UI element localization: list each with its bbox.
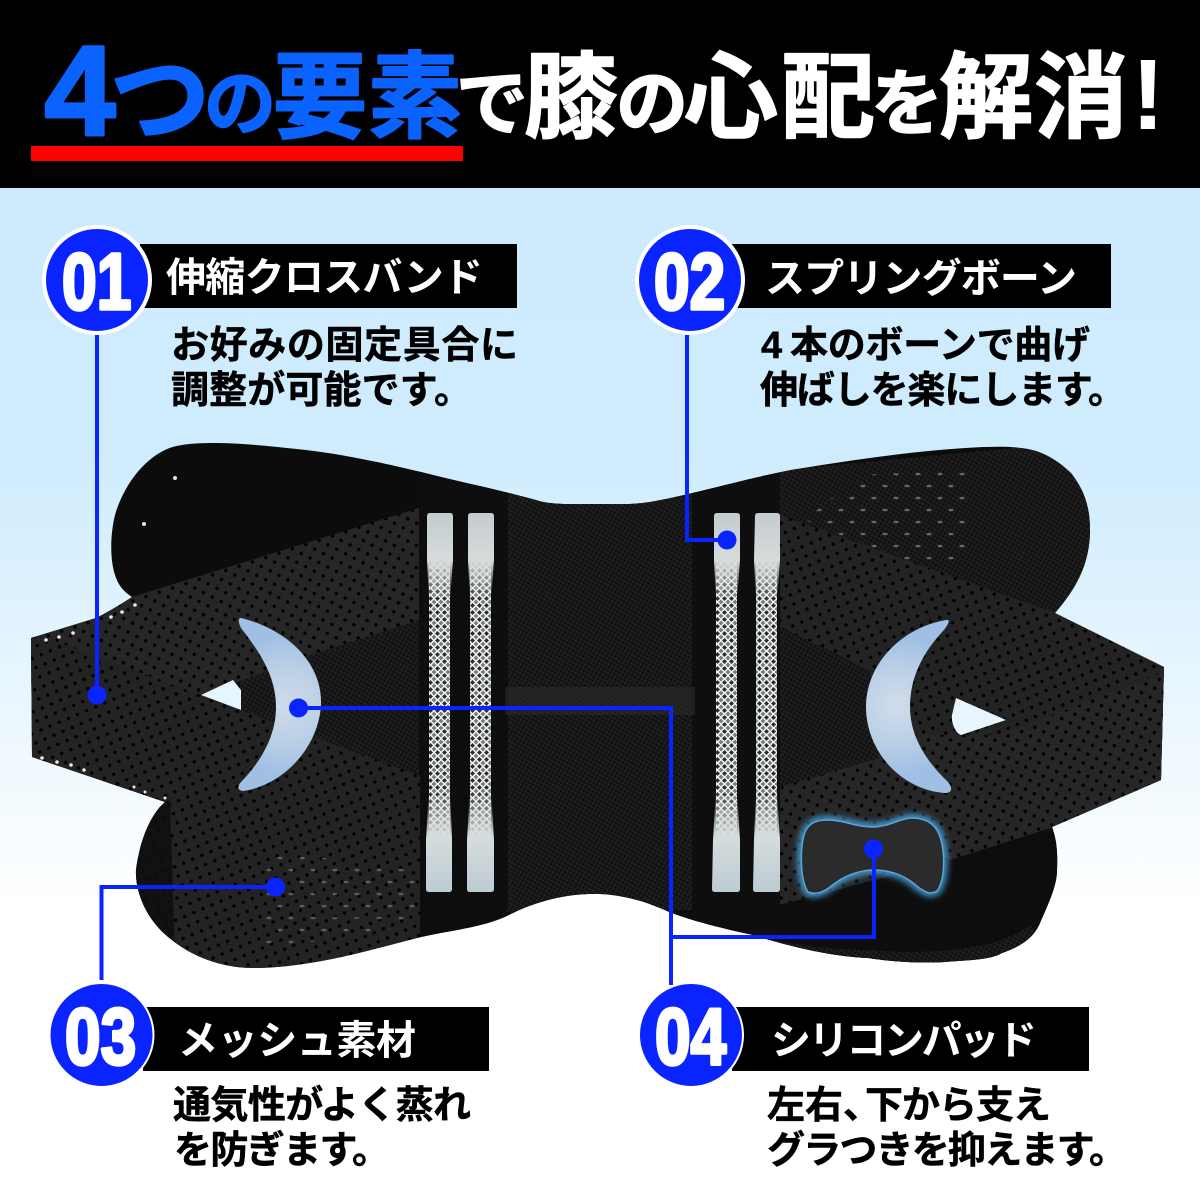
leader line 04 — [298, 708, 874, 985]
item 03: mesh material — [50, 983, 489, 1172]
item 04: silicone pad — [639, 983, 1127, 1172]
number badge 01 — [44, 227, 150, 333]
description 02 — [760, 325, 1126, 412]
spring bone 1 — [426, 513, 453, 892]
label text 04: シリコンパッド — [771, 1019, 1037, 1063]
description 01: お好みの固定具合に — [171, 325, 518, 367]
heading: 4つの要素で膝の心配を解消!: 素 — [368, 45, 462, 150]
right lower strap — [780, 670, 1170, 905]
right upper strap — [780, 515, 1164, 830]
item 01: stretch cross band — [44, 227, 518, 412]
description 02: 本のボーンで曲げ — [790, 325, 1090, 367]
leader line 01 — [95, 335, 99, 695]
bottom silicone pad — [801, 818, 944, 893]
number badge 03 — [50, 983, 154, 1087]
heading: 4つの要素で膝の心配を解消!: 4 — [44, 20, 116, 163]
spring bone 2 — [467, 513, 494, 892]
heading underline — [31, 146, 463, 161]
right knee-cap opening — [952, 698, 1006, 735]
label bar 04 — [732, 1007, 1089, 1071]
lobe edge shade — [136, 800, 174, 942]
number badge 01: 01 — [62, 238, 131, 327]
label text 01: 伸縮クロスバンド — [166, 256, 483, 300]
number badge 03: 03 — [65, 992, 136, 1082]
right ventilation spots — [805, 470, 965, 565]
description 04: 左右、 — [767, 1085, 881, 1127]
heading: 4つの要素で膝の心配を解消!: ! — [1131, 39, 1165, 151]
number badge 04 — [639, 983, 743, 1087]
leader dots — [88, 530, 883, 896]
description 03: を防ぎます。 — [174, 1130, 390, 1172]
central fabric panel — [505, 490, 695, 910]
strap left end — [31, 636, 200, 808]
label text 03: メッシュ素材 — [178, 1019, 416, 1063]
label bar 03 — [143, 1007, 489, 1071]
leader line 02 — [687, 335, 727, 540]
heading: 4つの要素で膝の心配を解消!: 解 — [939, 45, 1033, 150]
header band — [0, 0, 1200, 188]
heading: 4つの要素で膝の心配を解消! — [44, 20, 1165, 163]
number badge 02: 02 — [654, 237, 725, 327]
heading: 4つの要素で膝の心配を解消!: の — [616, 65, 688, 145]
heading: 4つの要素で膝の心配を解消!: 膝 — [524, 45, 618, 150]
centre horizontal strip — [505, 687, 695, 715]
knee brace product illustration — [31, 443, 1164, 968]
left bone channel — [418, 470, 508, 940]
right mid panel — [780, 627, 879, 787]
left knee-cap opening — [201, 680, 241, 710]
description 01 — [171, 325, 518, 412]
description 01: 調整が可能です。 — [171, 370, 472, 412]
left silicone crescent — [238, 618, 321, 791]
description 04 — [767, 1085, 1127, 1172]
label text 02: スプリングボーン — [765, 257, 1077, 301]
description 04: グラつきを抑えます。 — [767, 1130, 1127, 1172]
right bone channel — [692, 470, 784, 940]
lower-right lobe — [780, 825, 1060, 970]
label bar 01 — [140, 244, 517, 308]
upper-left mesh strap — [20, 508, 419, 700]
right silicone crescent — [866, 620, 951, 793]
heading: 4つの要素で膝の心配を解消!: つ — [110, 44, 210, 156]
heading: 4つの要素で膝の心配を解消!: 要 — [273, 45, 367, 150]
description 03: 通気性がよく蒸れ — [173, 1085, 471, 1127]
left mid panel — [240, 620, 419, 780]
number badge 02 — [637, 227, 743, 333]
lower-left ventilation spots — [266, 856, 414, 944]
number badge 04: 04 — [655, 992, 726, 1082]
lower edge fabric — [506, 899, 1035, 962]
label bar 02 — [730, 244, 1111, 308]
heading: 4つの要素で膝の心配を解消!: を — [871, 65, 943, 145]
heading: 4つの要素で膝の心配を解消!: 配 — [781, 45, 875, 150]
description 04: 下から支え — [865, 1085, 1051, 1127]
strap edge perforations — [40, 476, 177, 800]
item 02: spring bone — [637, 227, 1126, 412]
spring bone 3 — [712, 513, 740, 892]
description 03 — [173, 1085, 471, 1172]
description 02: 4 — [761, 325, 782, 367]
leader line 03 — [102, 887, 275, 980]
heading: 4つの要素で膝の心配を解消!: で — [456, 65, 528, 145]
right upper lobe fabric — [780, 448, 1090, 614]
description 02: 伸ばしを楽にします。 — [760, 370, 1126, 412]
heading: 4つの要素で膝の心配を解消!: 心 — [684, 45, 778, 150]
lower-left mesh lobe — [103, 700, 420, 968]
spring bone 4 — [753, 513, 780, 892]
heading: 4つの要素で膝の心配を解消!: の — [204, 65, 276, 145]
heading: 4つの要素で膝の心配を解消!: 消 — [1034, 45, 1128, 150]
